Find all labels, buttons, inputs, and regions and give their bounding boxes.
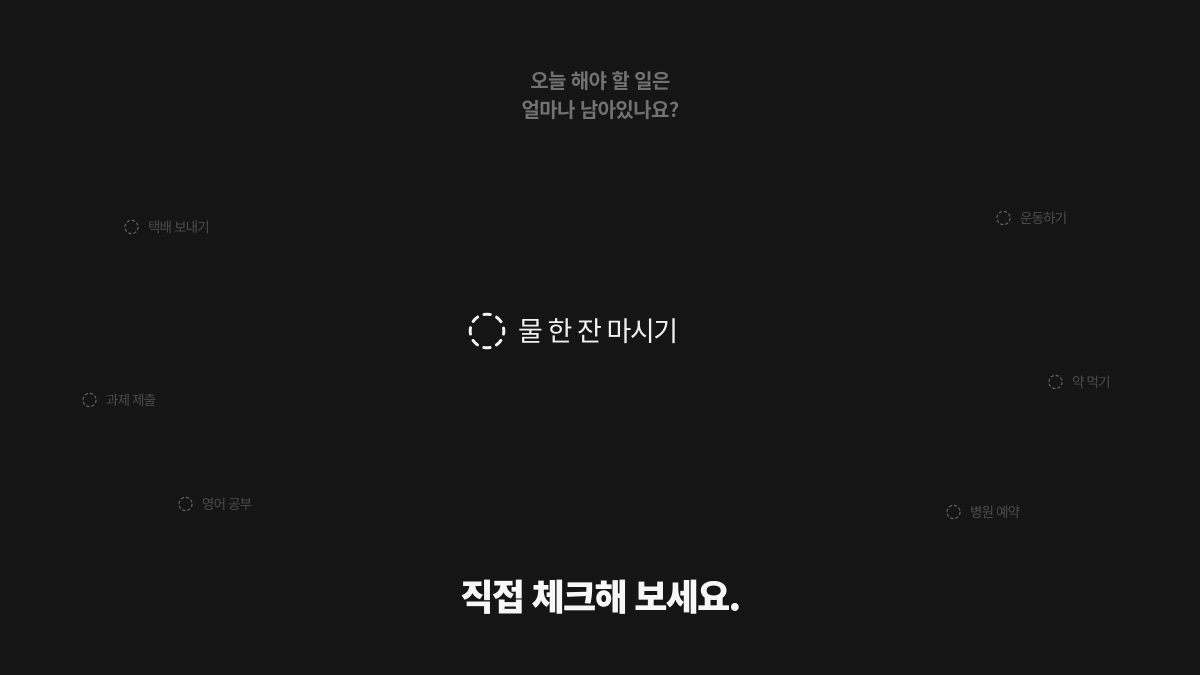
task: 과제 제출 xyxy=(82,389,156,409)
task: 택배 보내기: 택배 보내기 xyxy=(148,216,209,236)
task label: 물 한 잔 마시기: 물 한 잔 마시기 xyxy=(518,310,677,349)
heading: question xyxy=(521,65,679,123)
task: 운동하기: 운동하기 xyxy=(1020,207,1066,227)
task: 운동하기 xyxy=(996,207,1066,227)
heading: question: 얼마나 남아있나요? xyxy=(521,94,679,123)
heading: question: 오늘 해야 할 일은 xyxy=(530,65,670,94)
task: 약 먹기: 약 먹기 xyxy=(1072,371,1110,391)
task: 약 먹기 xyxy=(1048,371,1110,391)
task: 병원 예약 xyxy=(946,501,1020,521)
icon: dashed checkbox xyxy=(468,312,506,350)
task: 영어 공부 xyxy=(178,493,252,513)
task: 병원 예약: 병원 예약 xyxy=(970,501,1019,521)
task: 과제 제출: 과제 제출 xyxy=(106,389,155,409)
heading: call to action: 직접 체크해 보세요. xyxy=(460,569,740,621)
task: 영어 공부: 영어 공부 xyxy=(202,493,251,513)
